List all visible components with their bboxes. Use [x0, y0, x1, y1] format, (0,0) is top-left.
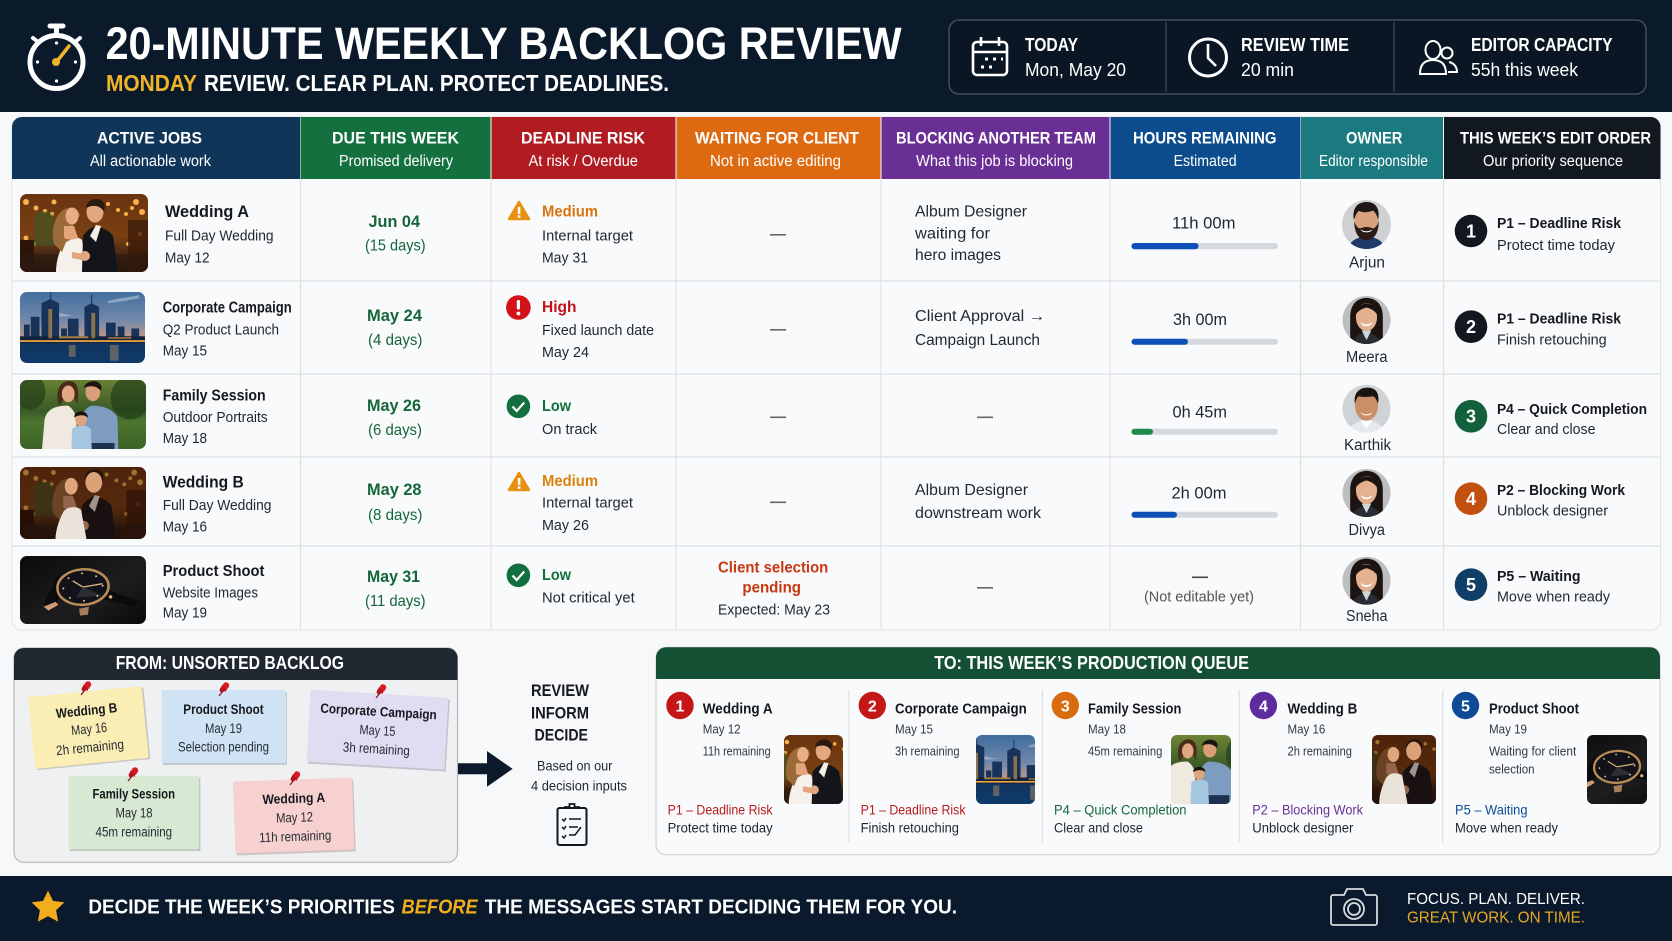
job details: May 18: [163, 430, 207, 447]
heading: due this week: Promised delivery: [339, 153, 453, 170]
job details: May 12: [165, 250, 210, 267]
card: Wedding A: 1: [676, 698, 685, 716]
heading: owner: Editor responsible: [1319, 153, 1428, 170]
card: Wedding A: May 12: [703, 722, 741, 737]
hours bar: [1132, 310, 1278, 345]
panel: production queue: [656, 647, 1672, 855]
note: Wedding A: [233, 777, 356, 856]
due date: [365, 212, 426, 255]
avatar: Sneha: Sneha: [1346, 608, 1388, 625]
blocking text: Album Designer: [915, 204, 1028, 221]
heading: blocking another team: BLOCKING ANOTHER TEAM: [896, 128, 1096, 148]
blocking text: Campaign Launch: [915, 332, 1040, 349]
heading: this week's edit order: Our priority sequence: [1483, 153, 1623, 170]
note: Product Shoot: Product Shoot: [183, 702, 264, 717]
job details: May 16: [163, 519, 207, 536]
arrow: [458, 751, 513, 787]
heading: hours remaining: Estimated: [1174, 153, 1237, 170]
priority 2: 2: [1466, 317, 1476, 337]
tagline: FOCUS. PLAN. DELIVER.: [1407, 891, 1585, 908]
heading: active jobs: [90, 128, 211, 170]
avatar: Arjun: [1342, 200, 1391, 272]
panel: main table: [12, 117, 1661, 630]
pins: [81, 681, 386, 785]
job details: [163, 473, 272, 536]
risk text: May 31: [542, 250, 588, 267]
risk text: Fixed launch date: [542, 322, 654, 339]
note: Wedding B: [28, 686, 150, 770]
dash: [770, 416, 786, 418]
avatar: Karthik: [1342, 385, 1391, 454]
blocking text: waiting for: [914, 226, 991, 242]
card: Corporate Campaign: Finish retouching: [861, 821, 959, 836]
card: Corporate Campaign: Corporate Campaign: [895, 701, 1027, 717]
text: review time: 20 min: [1241, 60, 1294, 80]
priority 3: 3: [1466, 407, 1476, 427]
not editable note: (Not editable yet): [1144, 589, 1254, 606]
priority 3: Clear and close: [1497, 421, 1596, 438]
risk text: Low: [542, 567, 571, 584]
row: product shoot: [20, 556, 1610, 624]
photo: wedding B: [20, 465, 146, 541]
heading: owner: OWNER: [1346, 128, 1402, 148]
due date: (8 days): [368, 507, 422, 524]
priority 5: [1455, 568, 1610, 606]
note: Wedding A: Wedding A: [262, 790, 326, 807]
review inform decide: 4 decision inputs: [531, 777, 627, 793]
due date: (11 days): [365, 593, 426, 610]
priority 2: [1455, 310, 1622, 349]
card: Wedding B: 2h remaining: [1288, 744, 1352, 759]
job details: [163, 563, 264, 622]
card: Wedding A: Protect time today: [668, 821, 773, 836]
row: wedding A: [20, 194, 1622, 272]
text: today: [1025, 35, 1126, 80]
takeaway: DECIDE THE WEEK’S PRIORITIES: [88, 897, 395, 919]
card: Family Session: 45m remaining: [1088, 744, 1162, 759]
note: Wedding B: May 16: [70, 720, 108, 738]
heading: production queue: TO: THIS WEEK’S PRODUCTION QUEUE: [934, 653, 1249, 673]
tagline: GREAT WORK. ON TIME.: [1407, 910, 1585, 927]
avatar: Sneha: [1342, 557, 1390, 625]
icon: warning: [509, 473, 529, 490]
job details: [163, 388, 268, 447]
job details: [165, 202, 274, 267]
card: Wedding A: 11h remaining: [703, 744, 771, 759]
heading: waiting for client: WAITING FOR CLIENT: [695, 128, 860, 148]
not editable note: [1144, 576, 1254, 606]
panel: today, review time, editor capacity: [949, 20, 1646, 94]
avatar: Karthik: Karthik: [1344, 437, 1391, 454]
priority 4: [1455, 482, 1626, 520]
job details: Corporate Campaign: [163, 300, 292, 317]
footer band: [0, 876, 1672, 941]
avatar: Divya: [1342, 469, 1390, 539]
card: Wedding B: 4: [1259, 698, 1268, 716]
hours bar: [1132, 403, 1278, 435]
risk text: Internal target: [542, 494, 634, 511]
priority 1: [1455, 215, 1622, 254]
review inform decide: REVIEW: [531, 681, 590, 700]
hours bar: 2h 00m: [1172, 483, 1226, 502]
job details: May 19: [163, 605, 207, 622]
note: Corporate Campaign: May 15: [359, 722, 396, 739]
due date: (6 days): [368, 422, 422, 439]
icon: low risk: [507, 394, 530, 418]
icon: clock: [1190, 39, 1226, 76]
priority 3: [1455, 400, 1647, 438]
job details: May 15: [163, 343, 207, 360]
hours bar: 3h 00m: [1173, 310, 1227, 329]
due date: (15 days): [365, 238, 426, 255]
risk text: [542, 567, 636, 607]
card: Family Session: Family Session: [1088, 701, 1181, 717]
heading: this week's edit order: [1460, 128, 1651, 170]
blocking text: [915, 308, 1045, 349]
job details: Wedding B: [163, 473, 244, 492]
priority 4: 4: [1466, 489, 1476, 509]
heading: deadline risk: [521, 128, 646, 170]
job details: Full Day Wedding: [165, 228, 274, 244]
subtitle: MONDAY: [106, 70, 197, 96]
card: Product Shoot: P5 – Waiting: [1455, 802, 1528, 817]
review inform decide: [531, 681, 627, 845]
text: today: TODAY: [1025, 35, 1078, 55]
card: Family Session: May 18: [1088, 722, 1126, 737]
dash: [770, 329, 786, 331]
row: wedding B: [20, 465, 1626, 541]
avatar: Meera: Meera: [1346, 349, 1388, 366]
card: Wedding B: P2 – Blocking Work: [1252, 802, 1363, 817]
waiting callout: Expected: May 23: [718, 601, 830, 618]
photo: city: [20, 289, 145, 366]
card: Product Shoot: [1452, 692, 1647, 836]
heading: hours remaining: HOURS REMAINING: [1133, 128, 1276, 148]
card: Corporate Campaign: 3h remaining: [895, 744, 960, 759]
due date: May 24: [367, 306, 423, 325]
card: Wedding B: [1250, 692, 1436, 836]
card: Product Shoot: May 19: [1489, 722, 1527, 737]
due date: May 31: [367, 567, 420, 586]
heading: waiting for client: Not in active editing: [710, 153, 841, 170]
icon: camera: [1331, 889, 1377, 925]
due date: [367, 306, 423, 349]
icon: clipboard: [558, 804, 586, 845]
icon: editors: [1420, 41, 1457, 74]
card: Corporate Campaign: P1 – Deadline Risk: [861, 802, 966, 817]
note: Product Shoot: [162, 690, 287, 765]
review inform decide: DECIDE: [534, 726, 588, 745]
waiting callout: Client selection: [718, 559, 828, 576]
heading: due this week: [332, 128, 460, 170]
card: Product Shoot: Waiting for client: [1489, 744, 1577, 759]
review inform decide: Based on our: [537, 757, 613, 773]
card: Product Shoot: Product Shoot: [1489, 701, 1579, 717]
table header colours: [12, 117, 1661, 179]
job details: Website Images: [163, 584, 258, 601]
due date: May 28: [367, 480, 422, 499]
dash: [977, 587, 993, 589]
panel: unsorted backlog: [14, 648, 458, 862]
icon: calendar: [973, 37, 1007, 75]
waiting callout: [718, 559, 830, 618]
blocking text: [914, 204, 1028, 264]
due date: [365, 567, 426, 610]
card: Wedding B: Wedding B: [1288, 701, 1357, 717]
heading: owner: [1319, 128, 1428, 170]
text: editor capacity: 55h this week: [1471, 60, 1579, 80]
card: Family Session: 3: [1061, 698, 1070, 716]
due date: Jun 04: [368, 212, 421, 231]
risk text: [542, 398, 597, 438]
hours bar: [1132, 483, 1278, 518]
priority 3: P4 – Quick Completion: [1497, 401, 1647, 418]
subtitle: REVIEW. CLEAR PLAN. PROTECT DEADLINES.: [204, 70, 669, 96]
takeaway: THE MESSAGES START DECIDING THEM FOR YOU.: [485, 897, 957, 919]
priority 2: Finish retouching: [1497, 332, 1607, 349]
card: Wedding A: P1 – Deadline Risk: [668, 802, 773, 817]
hours bar: 11h 00m: [1172, 214, 1236, 233]
icon: high risk: [506, 295, 531, 320]
waiting callout: pending: [742, 580, 801, 597]
icon: stopwatch: [30, 26, 83, 88]
note: Family Session: [69, 776, 200, 851]
risk text: Medium: [542, 473, 598, 490]
risk text: Medium: [542, 204, 598, 221]
priority 5: Move when ready: [1497, 589, 1610, 606]
note: Family Session: Family Session: [92, 786, 175, 801]
photo: family: [20, 380, 146, 449]
blocking text: hero images: [915, 247, 1001, 264]
risk text: Low: [542, 398, 571, 415]
heading: waiting for client: [695, 128, 860, 170]
job details: Family Session: [163, 388, 266, 405]
heading: blocking another team: What this job is blocking: [916, 153, 1073, 170]
risk text: High: [542, 299, 576, 316]
text: review time: [1241, 35, 1349, 80]
card: Wedding B: Unblock designer: [1252, 821, 1354, 836]
note: Corporate Campaign: 3h remaining: [343, 740, 410, 758]
row: family session: [20, 380, 1646, 450]
due date: [367, 480, 422, 524]
card: Wedding B: May 16: [1288, 722, 1325, 737]
card: Family Session: Clear and close: [1054, 821, 1143, 836]
blocking text: Album Designer: [915, 482, 1029, 499]
job details: Q2 Product Launch: [163, 322, 279, 339]
priority 2: P1 – Deadline Risk: [1497, 310, 1622, 327]
title: 20-MINUTE WEEKLY BACKLOG REVIEW: [106, 18, 902, 69]
risk text: May 26: [542, 517, 589, 534]
card: Wedding A: [666, 692, 843, 836]
risk text: Not critical yet: [542, 590, 636, 607]
priority 1: 1: [1466, 222, 1476, 242]
risk text: May 24: [542, 344, 589, 361]
job details: Full Day Wedding: [163, 497, 272, 514]
note: Wedding A: 11h remaining: [259, 828, 331, 845]
note: Family Session: 45m remaining: [96, 825, 172, 840]
header band: [0, 0, 1672, 112]
job details: Outdoor Portraits: [163, 409, 268, 426]
risk text: [542, 204, 634, 267]
risk text: On track: [542, 421, 597, 438]
card: Corporate Campaign: [858, 692, 1035, 836]
due date: May 26: [367, 396, 421, 415]
heading: active jobs: ACTIVE JOBS: [97, 128, 202, 148]
job details: [163, 300, 292, 360]
priority 5: 5: [1466, 575, 1476, 595]
blocking text: [915, 482, 1042, 522]
icon: star: [32, 891, 64, 922]
blocking text: downstream work: [915, 505, 1042, 522]
icon: warning: [509, 202, 529, 219]
card: Product Shoot: Move when ready: [1455, 821, 1558, 836]
card: Corporate Campaign: May 15: [895, 722, 933, 737]
note: Wedding B: 2h remaining: [55, 737, 125, 758]
avatar: Meera: [1342, 296, 1390, 366]
due date: (4 days): [368, 332, 422, 349]
takeaway: [88, 897, 957, 919]
photo: watch: [20, 556, 146, 624]
note: Wedding B: Wedding B: [55, 700, 118, 721]
priority 1: Protect time today: [1497, 237, 1615, 254]
heading: hours remaining: [1133, 128, 1276, 170]
risk text: [542, 299, 654, 361]
job details: Wedding A: [165, 202, 249, 221]
heading: blocking another team: [896, 128, 1096, 170]
heading: deadline risk: At risk / Overdue: [528, 153, 638, 170]
note: Corporate Campaign: Corporate Campaign: [320, 701, 437, 722]
note: Corporate Campaign: [306, 690, 450, 771]
note: Product Shoot: May 19: [205, 721, 242, 736]
note: Family Session: May 18: [116, 806, 152, 821]
blocking text: Client Approval →: [915, 308, 1045, 325]
photo: wedding A: [20, 194, 148, 272]
heading: deadline risk: DEADLINE RISK: [521, 128, 646, 148]
due date: [367, 396, 422, 439]
heading: from unsorted backlog: FROM: UNSORTED BACKLOG: [116, 653, 344, 673]
card: Family Session: [1052, 692, 1231, 832]
priority 1: P1 – Deadline Risk: [1497, 215, 1622, 232]
icon: low risk: [507, 564, 530, 587]
card: Product Shoot: 5: [1461, 698, 1470, 716]
text: editor capacity: EDITOR CAPACITY: [1471, 35, 1612, 55]
dash: [977, 416, 993, 418]
priority 4: Unblock designer: [1497, 503, 1608, 520]
card: Wedding A: Wedding A: [703, 701, 773, 717]
job details: Product Shoot: [163, 563, 264, 580]
hours bar: 0h 45m: [1172, 403, 1227, 422]
hours bar: [1132, 214, 1278, 249]
card: Family Session: P4 – Quick Completion: [1054, 802, 1186, 817]
dash: [770, 234, 786, 236]
text: review time: REVIEW TIME: [1241, 35, 1349, 55]
risk text: Internal target: [542, 228, 634, 245]
tagline: [1407, 891, 1585, 927]
note: Product Shoot: Selection pending: [178, 740, 269, 755]
avatar: Arjun: Arjun: [1349, 255, 1385, 272]
card: Product Shoot: selection: [1489, 761, 1535, 776]
takeaway: BEFORE: [402, 897, 478, 919]
text: today: Mon, May 20: [1025, 60, 1126, 80]
review inform decide: INFORM: [531, 704, 589, 723]
risk text: [542, 473, 634, 534]
row: corporate campaign: [20, 289, 1622, 366]
heading: active jobs: All actionable work: [90, 153, 211, 170]
avatar: Divya: Divya: [1348, 522, 1385, 539]
heading: due this week: DUE THIS WEEK: [332, 128, 460, 148]
priority 5: P5 – Waiting: [1497, 568, 1580, 585]
card: Corporate Campaign: 2: [868, 698, 877, 716]
priority 4: P2 – Blocking Work: [1497, 482, 1626, 499]
text: editor capacity: [1471, 35, 1612, 80]
dash: [770, 502, 786, 503]
note: Wedding A: May 12: [276, 809, 313, 826]
grid lines: [12, 179, 1660, 630]
